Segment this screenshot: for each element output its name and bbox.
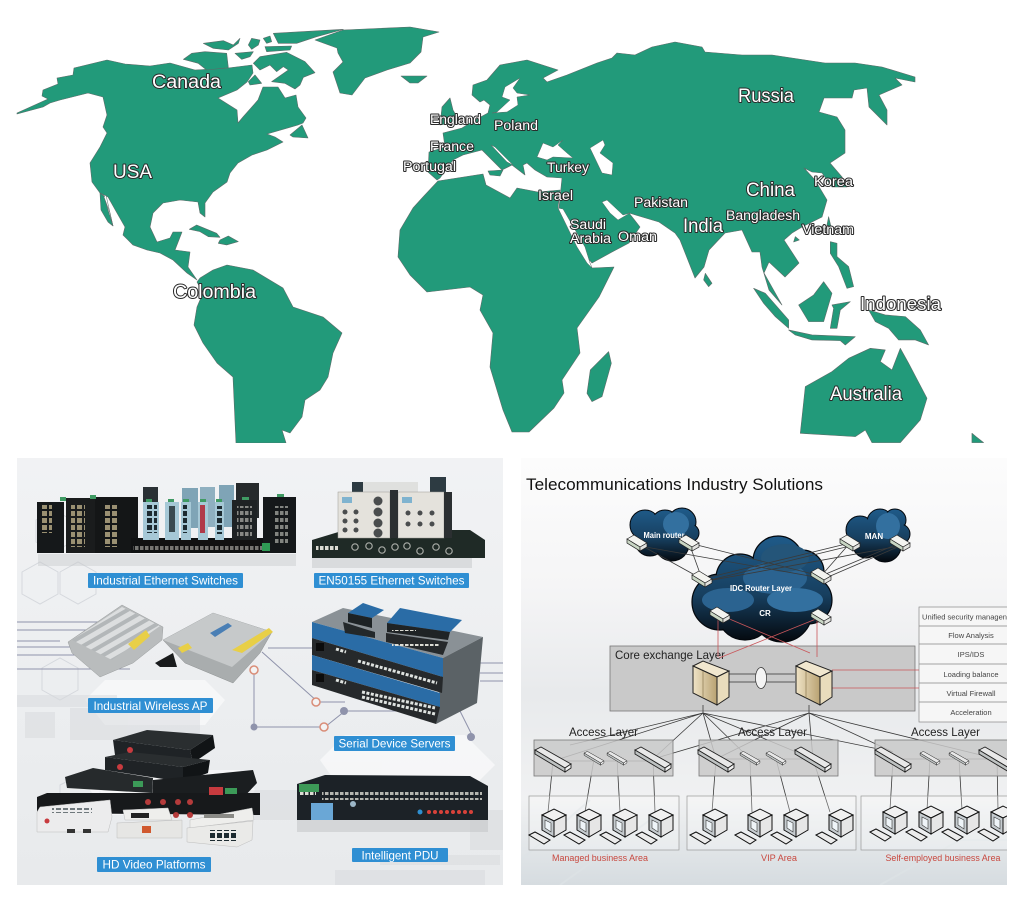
- red uplinks: [718, 615, 919, 688]
- Sicily: [488, 170, 503, 176]
- Eurasia: [428, 42, 915, 305]
- business area labels: Managed business Area: [552, 853, 648, 863]
- product: HD video platforms: [37, 730, 260, 847]
- country labels: Canada: [152, 72, 221, 93]
- South America: [194, 265, 342, 443]
- North America: [17, 60, 306, 280]
- product labels: Industrial Ethernet Switches: [93, 574, 238, 588]
- country labels: China: [746, 180, 795, 201]
- country labels: Oman: [618, 229, 657, 244]
- cloud: IDC router layer: [692, 536, 832, 642]
- cloud: main router: [630, 508, 699, 561]
- access layers: [534, 725, 1015, 776]
- Newfoundland: [290, 125, 308, 138]
- circuit nodes: [250, 666, 475, 741]
- country labels: Colombia: [173, 282, 256, 303]
- Baja California: [100, 193, 113, 226]
- security services table: Unified security managen: [922, 612, 1007, 622]
- country labels: Saudi: [570, 217, 606, 232]
- product labels: Intelligent PDU: [362, 848, 438, 862]
- world map: [17, 27, 984, 443]
- cloud: main router: Main router: [644, 531, 684, 540]
- computers: [529, 806, 1015, 844]
- country labels: Poland: [494, 118, 538, 133]
- cloud: IDC router layer: CR: [759, 609, 771, 618]
- Caribbean islands: [189, 225, 238, 245]
- cloud: MAN: [846, 509, 910, 562]
- country labels: Korea: [814, 174, 854, 189]
- country labels: Arabia: [570, 231, 612, 246]
- country labels: Israel: [538, 188, 573, 203]
- product: serial device servers: [312, 603, 483, 724]
- heading: Telecommunications Industry Solutions: [526, 475, 823, 494]
- Arctic islands: [183, 29, 343, 89]
- security services table: Flow Analysis: [948, 631, 994, 640]
- core exchange layer: [610, 646, 915, 711]
- business area labels: Self-employed business Area: [886, 853, 1000, 863]
- access layers: Access Layer: [911, 725, 980, 739]
- Great Britain: [440, 98, 460, 125]
- Asia Pacific islands: [587, 217, 984, 443]
- panel: telecommunications solutions: [521, 458, 1021, 885]
- Greenland: [315, 27, 439, 95]
- product labels: HD Video Platforms: [102, 858, 206, 872]
- product labels: Serial Device Servers: [338, 736, 450, 750]
- cloud: MAN: MAN: [865, 532, 883, 541]
- product labels: [88, 573, 469, 872]
- business areas: [529, 796, 1021, 850]
- cloud: IDC router layer: IDC Router Layer: [730, 584, 792, 593]
- security services table: Loading balance: [943, 670, 999, 679]
- security services table: Virtual Firewall: [946, 689, 996, 698]
- country labels: Bangladesh: [726, 208, 800, 223]
- business area labels: [552, 853, 1000, 863]
- core exchange layer: Core exchange Layer: [615, 648, 725, 662]
- business area labels: VIP Area: [761, 853, 797, 863]
- Africa: [398, 174, 614, 432]
- Iceland: [401, 76, 427, 83]
- country labels: [113, 72, 942, 405]
- product: intelligent PDU: [297, 775, 488, 832]
- security services table: [919, 607, 1011, 722]
- access layers: Access Layer: [569, 725, 638, 739]
- product: industrial ethernet switches: [37, 483, 296, 566]
- country labels: Indonesia: [860, 294, 942, 314]
- security services table: IPS/IDS: [958, 650, 984, 659]
- country labels: Pakistan: [634, 195, 688, 210]
- inland seas: [104, 78, 630, 268]
- access switches: [535, 747, 1015, 772]
- circuit lines: [17, 622, 503, 735]
- product labels: EN50155 Ethernet Switches: [318, 574, 464, 588]
- country labels: Vietnam: [802, 222, 854, 237]
- product: industrial wireless AP: [68, 605, 273, 683]
- country labels: USA: [113, 162, 152, 183]
- country labels: Turkey: [547, 160, 589, 175]
- country labels: India: [683, 216, 723, 237]
- country labels: Australia: [830, 384, 902, 405]
- country labels: Portugal: [403, 159, 456, 174]
- routers: [627, 535, 910, 625]
- core servers and link: [693, 661, 832, 705]
- country labels: Russia: [738, 86, 794, 107]
- product: EN50155 ethernet switches: [312, 477, 485, 568]
- country labels: England: [430, 112, 481, 127]
- panel: product range: [17, 458, 503, 885]
- country labels: France: [430, 139, 474, 154]
- network links: [548, 543, 998, 812]
- map landmasses: [17, 27, 984, 443]
- security services table: Acceleration: [950, 708, 992, 717]
- access layers: Access Layer: [738, 725, 807, 739]
- product labels: Industrial Wireless AP: [94, 699, 208, 713]
